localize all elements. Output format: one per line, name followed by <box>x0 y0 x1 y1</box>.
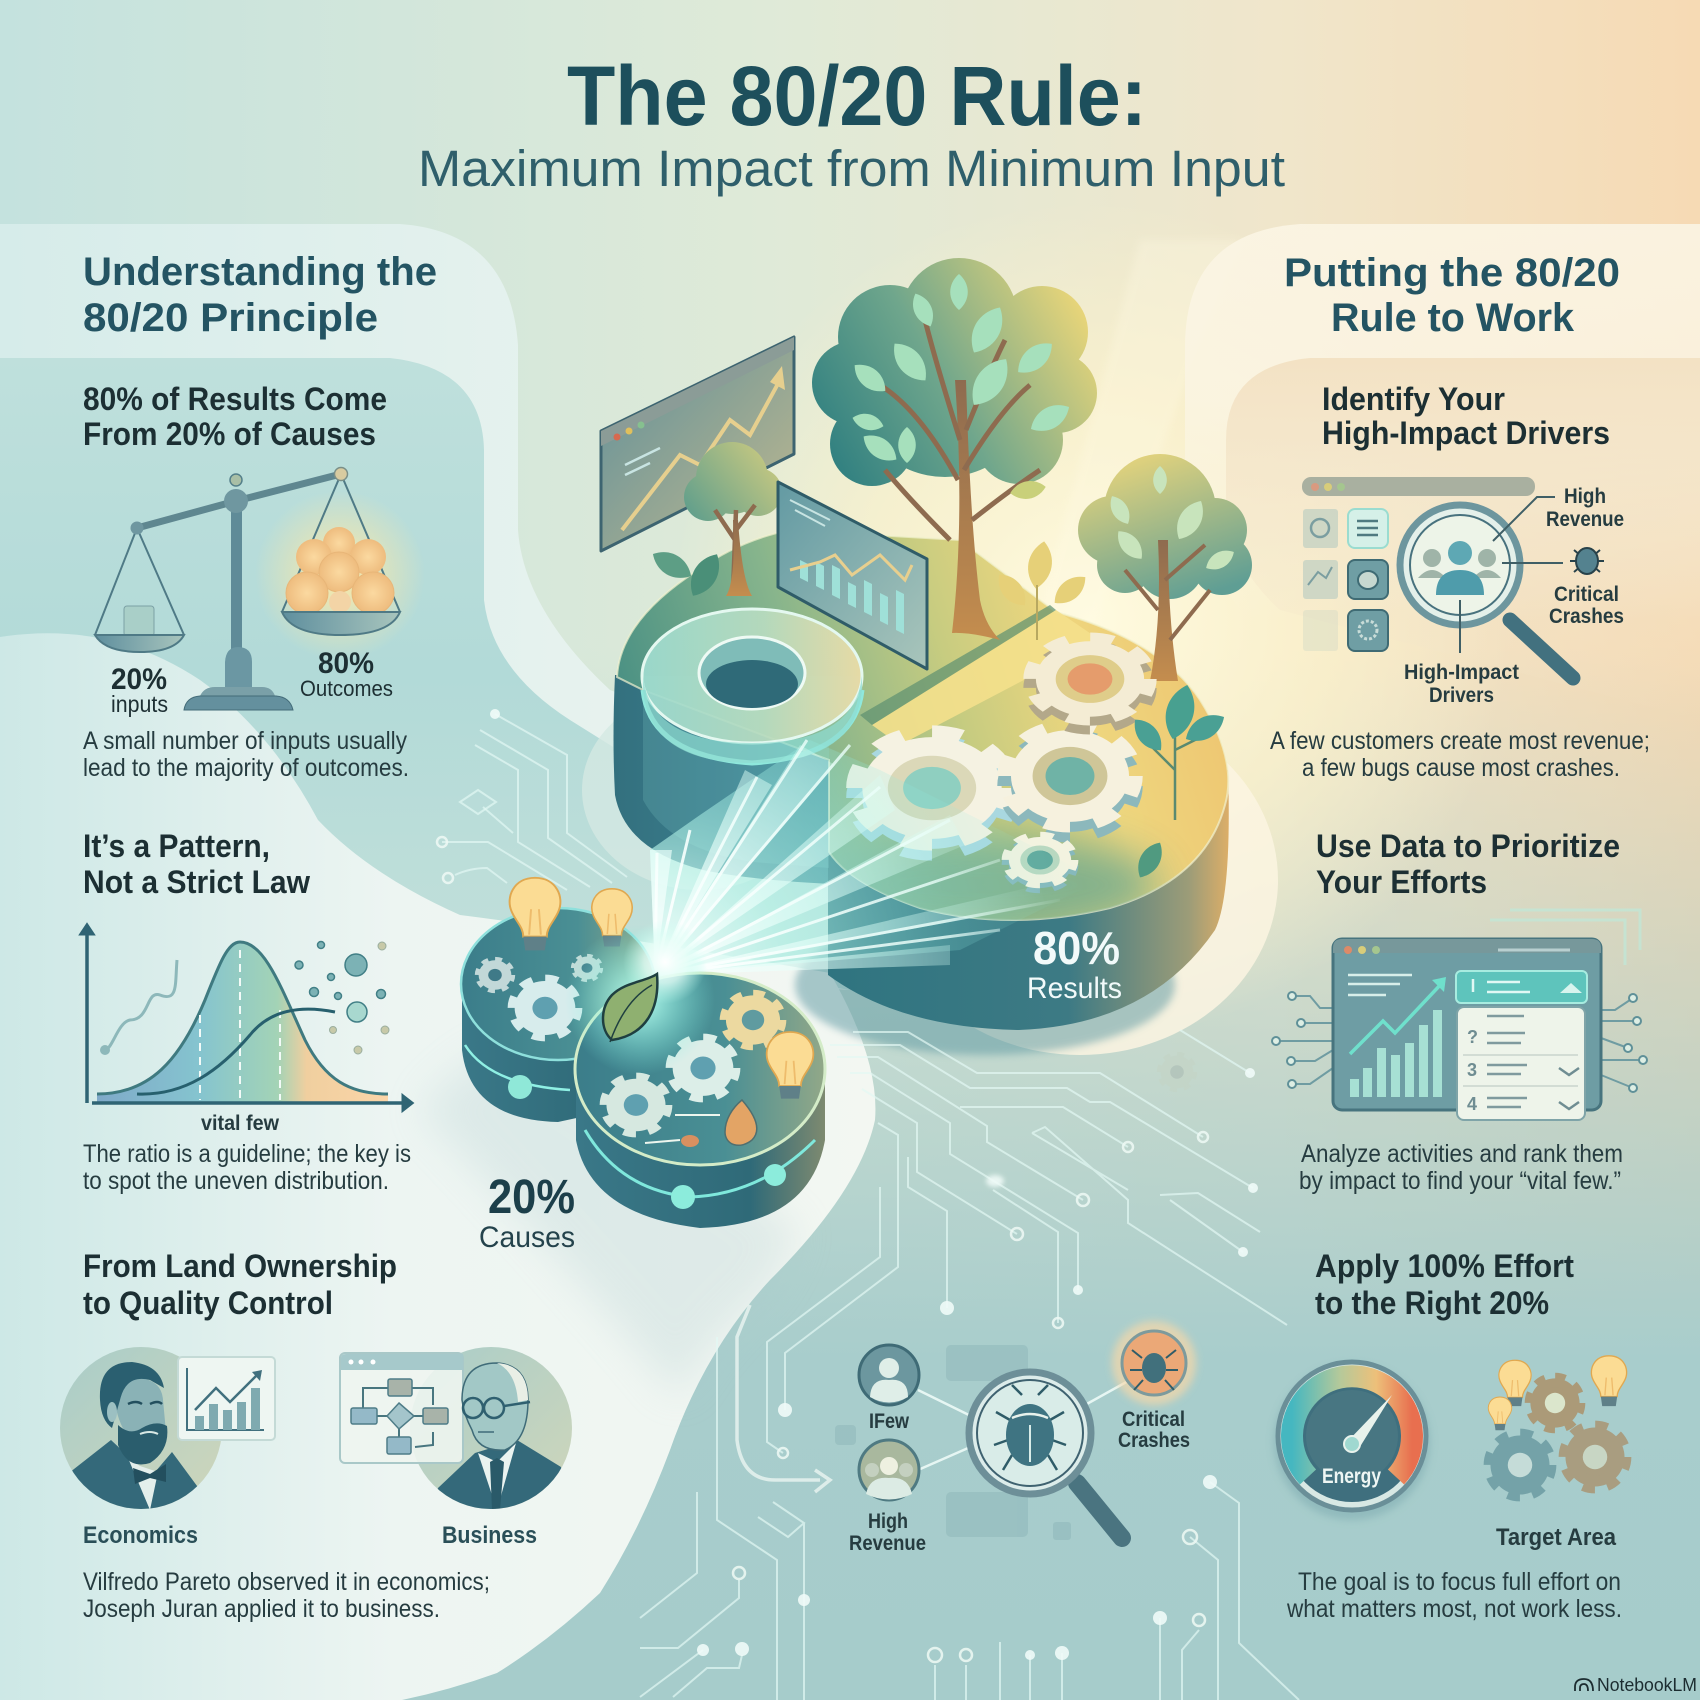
label: 80% results <box>1027 922 1122 1005</box>
subheading: to the Right 20% <box>1315 1285 1549 1321</box>
icon: data dashboard: 4 <box>1467 1094 1477 1114</box>
label: critical crashes: Critical <box>1122 1408 1185 1431</box>
description: to spot the uneven distribution. <box>83 1167 389 1195</box>
label: 20% inputs: inputs <box>111 691 168 717</box>
subheading: Identify Your <box>1322 381 1505 417</box>
description <box>1286 1568 1622 1623</box>
gears <box>857 639 1148 890</box>
description: by impact to find your “vital few.” <box>1299 1167 1621 1195</box>
label: Business: Business <box>442 1522 537 1549</box>
panel: From Land Ownership <box>60 1248 572 1623</box>
icon labels: Revenue <box>1546 508 1624 531</box>
energy beam <box>650 740 1100 975</box>
heading: to Quality Control <box>83 1285 333 1321</box>
chart label: vital few <box>201 1112 280 1135</box>
gauge label: Energy <box>1322 1465 1381 1488</box>
label: critical crashes: Crashes <box>1118 1429 1190 1452</box>
brand mark: NotebookLM: NotebookLM <box>1597 1675 1697 1695</box>
avatar: few <box>859 1345 919 1405</box>
icon: balance scale <box>95 468 425 710</box>
illustration: bug under magnifier <box>835 1321 1196 1555</box>
avatar: high revenue <box>859 1440 919 1500</box>
icon: data dashboard <box>1272 910 1647 1120</box>
subheading <box>1322 381 1610 451</box>
heading <box>83 828 310 900</box>
label: 80% outcomes <box>300 647 393 701</box>
cream halo behind platform <box>882 705 1278 1055</box>
icon: leaf <box>565 920 715 1075</box>
heading: Rule to Work <box>1331 296 1575 340</box>
subheading: High-Impact Drivers <box>1322 415 1610 451</box>
magnifier with bug <box>969 1372 1122 1538</box>
circuit traces background <box>437 709 1299 1700</box>
subheading <box>1316 828 1620 900</box>
subheading: From 20% of Causes <box>83 416 376 452</box>
description: The ratio is a guideline; the key is <box>83 1140 411 1168</box>
heading <box>1284 251 1620 340</box>
icon: energy gauge <box>1274 1362 1430 1520</box>
panel: Putting the 80/20 Rule to Work <box>1270 251 1650 1623</box>
icon labels: Crashes <box>1549 605 1624 628</box>
title: The 80/20 Rule: <box>567 49 1147 143</box>
heading: It’s a Pattern, <box>83 828 270 864</box>
right disk <box>575 973 825 1228</box>
label: 20% causes: Causes <box>479 1221 575 1254</box>
portrait: Pareto <box>60 1347 222 1520</box>
label: 20% causes <box>479 1171 575 1254</box>
label: high revenue <box>849 1510 926 1555</box>
icon: data dashboard: 3 <box>1467 1060 1477 1080</box>
illustration: 20% causes disks <box>461 878 825 1254</box>
description: A small number of inputs usually <box>83 727 407 755</box>
label: 80% outcomes: Outcomes <box>300 676 393 701</box>
icon labels: High-Impact <box>1404 661 1519 684</box>
portrait: Juran <box>438 1362 562 1509</box>
label: 20% inputs: 20% <box>111 663 167 696</box>
icon: gears and bulbs <box>1488 1356 1627 1497</box>
description: Vilfredo Pareto observed it in economics; <box>83 1568 490 1596</box>
icon labels: High <box>1564 485 1606 508</box>
description: lead to the majority of outcomes. <box>83 754 409 782</box>
glass ring <box>642 609 863 868</box>
tree: left small <box>648 442 782 602</box>
description: what matters most, not work less. <box>1286 1595 1622 1623</box>
tree: large center <box>812 258 1097 640</box>
tree: right small <box>1078 454 1252 681</box>
subheading: Apply 100% Effort <box>1315 1248 1574 1284</box>
subheading <box>1315 1248 1574 1321</box>
icon labels <box>1404 485 1624 707</box>
platform base <box>614 530 1229 1030</box>
subheading <box>83 381 387 452</box>
title <box>418 49 1285 197</box>
avatar: critical crashes <box>1112 1321 1196 1405</box>
panel: Understanding the 80/20 Principle <box>83 250 437 782</box>
label: 80% results: 80% <box>1033 922 1120 974</box>
label: critical crashes <box>1118 1408 1190 1452</box>
description: The goal is to focus full effort on <box>1298 1568 1621 1596</box>
label: 80% results: Results <box>1027 972 1122 1005</box>
trees <box>648 258 1252 681</box>
description <box>83 727 409 782</box>
left disk <box>461 878 660 1122</box>
panel: It's a Pattern <box>81 828 412 1195</box>
connector lines <box>918 1380 1130 1470</box>
heading: Putting the 80/20 <box>1284 251 1620 295</box>
illustration: 80% results platform <box>601 258 1252 1030</box>
heading <box>83 1248 397 1321</box>
description <box>83 1140 411 1195</box>
icon: data dashboard: ? <box>1467 1027 1478 1047</box>
label: few: IFew <box>869 1410 910 1433</box>
subtitle: Maximum Impact from Minimum Input <box>418 140 1285 197</box>
icon: dashboard with magnifier <box>1302 477 1604 678</box>
label: 20% inputs <box>111 663 168 717</box>
label: 80% outcomes: 80% <box>318 647 374 680</box>
subheading: Your Efforts <box>1316 864 1487 900</box>
description <box>1299 1140 1623 1195</box>
heading: From Land Ownership <box>83 1248 397 1284</box>
icon labels: Drivers <box>1429 684 1494 707</box>
label: 20% causes: 20% <box>488 1171 575 1224</box>
chart panel: front browser <box>778 482 927 669</box>
chart: bell curve <box>81 925 412 1110</box>
description: Analyze activities and rank them <box>1301 1140 1623 1168</box>
panel: left column backdrop <box>0 224 875 1700</box>
heading: 80/20 Principle <box>83 296 378 340</box>
platform cast shadow <box>795 915 1175 1055</box>
label: Economics: Economics <box>83 1522 198 1549</box>
description: a few bugs cause most crashes. <box>1302 754 1620 782</box>
subheading: 80% of Results Come <box>83 381 387 417</box>
subheading: Use Data to Prioritize <box>1316 828 1620 864</box>
label: Target Area: Target Area <box>1496 1524 1617 1551</box>
icon labels: Critical <box>1554 583 1619 606</box>
portrait backdrop: Juran <box>410 1347 572 1509</box>
description: Joseph Juran applied it to business. <box>83 1595 440 1623</box>
heading: Understanding the <box>83 250 437 294</box>
heading: Not a Strict Law <box>83 864 310 900</box>
label: high revenue: High <box>868 1510 908 1533</box>
description <box>83 1568 490 1623</box>
label: high revenue: Revenue <box>849 1532 926 1555</box>
description <box>1270 727 1650 782</box>
card: growth chart <box>178 1357 275 1440</box>
description: A few customers create most revenue; <box>1270 727 1650 755</box>
plants <box>992 539 1229 882</box>
panel: right column backdrop <box>1185 224 1700 720</box>
chart panel: rear browser <box>601 337 794 551</box>
card: flowchart <box>340 1353 463 1463</box>
faint UI cards <box>835 1345 1071 1540</box>
heading <box>83 250 437 340</box>
